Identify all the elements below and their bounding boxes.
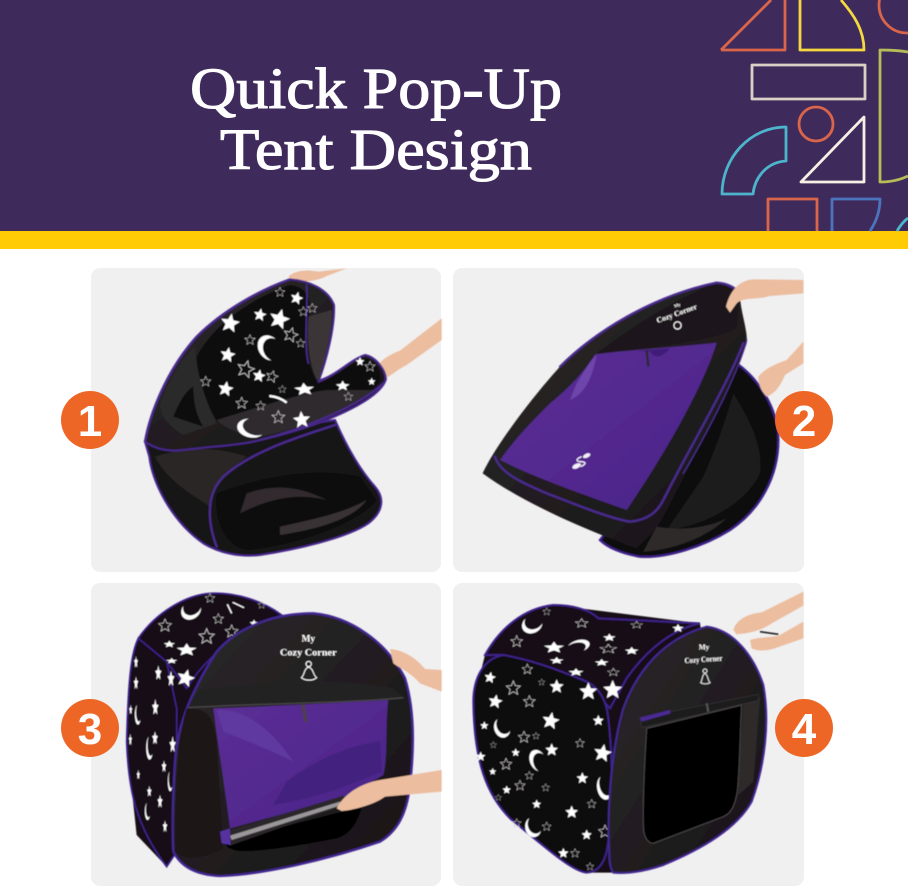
step badge 4 [775, 699, 833, 757]
tent logo text [280, 635, 337, 658]
icon: meditating figure [301, 661, 317, 680]
step badge 4: 4 [792, 705, 817, 754]
tent logo text [654, 297, 702, 335]
purple door [213, 700, 388, 828]
side and roof stars [129, 593, 265, 832]
decorative geometric shapes [721, 0, 908, 231]
tent logo text: Cozy Corner [684, 654, 723, 665]
tent step 1 [145, 268, 442, 556]
step badge 1 [61, 391, 119, 449]
hands [733, 592, 803, 634]
side panel [127, 638, 177, 867]
tent step 2 [483, 279, 803, 557]
title: Quick Pop-Up [190, 56, 562, 121]
roof [138, 593, 282, 688]
tent logo text: My [302, 635, 315, 645]
hand right [372, 318, 442, 382]
purple door [500, 343, 717, 510]
tent logo text: My [699, 642, 710, 651]
step badge 3 [61, 699, 119, 757]
front panel [609, 627, 766, 873]
tent silhouette base [473, 605, 717, 873]
hands [337, 770, 442, 811]
step badge 2: 2 [792, 397, 816, 446]
icon: meditating figure [701, 669, 710, 684]
panel 3: open tent, door rolling [61, 583, 442, 886]
star pattern [201, 287, 375, 439]
step badge 2 [775, 391, 833, 449]
step badge 3: 3 [78, 705, 102, 754]
panel 1: unfolding tent [61, 268, 442, 572]
tent step 3 [127, 593, 442, 876]
tent step 4 [473, 592, 803, 873]
tent logo text: Cozy Corner [280, 648, 337, 658]
step badge 1: 1 [78, 397, 102, 446]
roof [485, 605, 700, 708]
dark door opening [643, 705, 742, 843]
title: Tent Design [220, 117, 532, 182]
hand top [288, 268, 347, 281]
header banner [0, 0, 908, 231]
tent logo text [684, 642, 723, 665]
panel 2: half-open tent [453, 268, 833, 572]
upper lobe [145, 279, 386, 451]
star pattern [476, 608, 684, 870]
lower lobe [145, 420, 381, 556]
side panel [473, 655, 612, 873]
zipper trim [495, 343, 743, 522]
back trim [683, 340, 747, 473]
footprint logo [571, 452, 591, 470]
rolled door edge [225, 796, 347, 846]
front panel [173, 613, 413, 876]
panel 4: fully open tent [453, 583, 833, 886]
tent logo text: Cozy Corner [655, 302, 699, 325]
hand upper [726, 279, 803, 313]
folded front body [483, 283, 747, 548]
yellow stripe [0, 231, 908, 249]
back lobe [600, 363, 778, 557]
dark opening [225, 807, 362, 851]
rolled door [640, 694, 759, 728]
tent silhouette base [127, 593, 327, 867]
tent logo text: My [674, 302, 682, 310]
hand lower [758, 342, 803, 397]
